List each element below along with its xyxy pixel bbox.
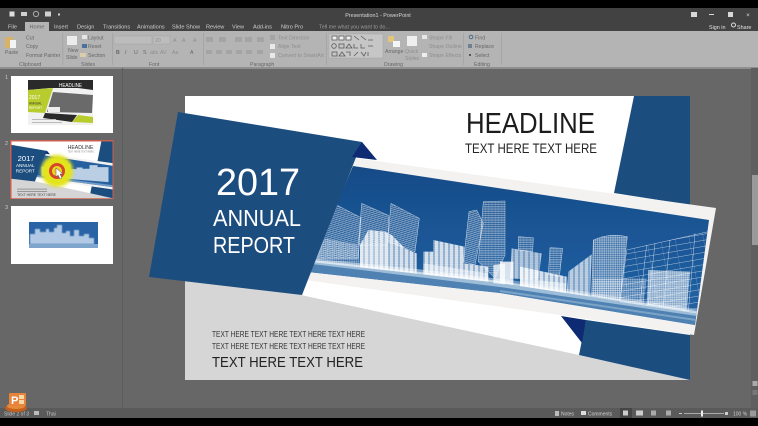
- status bar: Thai: [46, 412, 56, 418]
- thumbnail: slide 2 selected: REPORT: [16, 169, 35, 174]
- shapes gallery: Shape Effects: [429, 53, 462, 59]
- font group: I: [125, 50, 127, 56]
- report title: ANNUAL: [213, 205, 301, 231]
- ribbon tabs: [8, 22, 390, 32]
- navy fold bottom: [561, 316, 586, 343]
- font group: U: [134, 50, 138, 56]
- body text lines: [212, 329, 365, 351]
- font group: Font: [149, 62, 160, 68]
- ribbon separators: [62, 33, 502, 65]
- font group: B: [116, 50, 120, 56]
- shapes gallery: Replace: [475, 44, 494, 50]
- ribbon tabs: View: [232, 24, 245, 30]
- view buttons: [620, 408, 671, 418]
- ribbon tabs: Review: [206, 24, 225, 30]
- icon: PowerPoint mascot logo: [5, 393, 27, 412]
- body text lines: TEXT HERE TEXT HERE TEXT HERE TEXT HERE: [212, 341, 365, 351]
- paragraph group: Paragraph: [250, 62, 274, 68]
- thumbnail: slide 2 selected: ANNUAL: [16, 163, 35, 168]
- blue top right shape: [614, 96, 690, 205]
- shapes gallery: Arrange: [385, 49, 404, 55]
- font group: 20: [155, 38, 161, 44]
- font group: A: [173, 38, 177, 44]
- shapes gallery: Select: [475, 53, 490, 59]
- ribbon tabs: Transitions: [103, 24, 130, 30]
- slides group: Layout: [88, 36, 104, 42]
- thumbnail: slide 2 selected: 2017: [18, 154, 35, 163]
- thumbnail: slide 1: ANNUAL: [29, 102, 42, 106]
- water strip: [308, 262, 697, 325]
- blue bottom right shape: [579, 320, 690, 380]
- font group: [114, 36, 197, 68]
- clipboard group: [5, 36, 61, 68]
- slides group: New: [68, 48, 79, 54]
- zoom slider: 100 %: [733, 412, 748, 418]
- font group: A: [182, 38, 186, 44]
- body text lines: TEXT HERE TEXT HERE TEXT HERE TEXT HERE: [212, 329, 365, 339]
- year: 2017: [216, 162, 300, 204]
- slide: [149, 96, 716, 380]
- thumbnail: slide 2 selected: [4, 140, 118, 199]
- shapes gallery: Shape Fill: [429, 36, 452, 42]
- shapes gallery: Shape Outline: [429, 44, 462, 50]
- font group: A: [190, 50, 194, 56]
- workspace background: [0, 68, 758, 408]
- notes and comments: [555, 411, 613, 418]
- account links: [709, 23, 751, 31]
- ribbon tabs: Insert: [54, 24, 68, 30]
- font group: AV: [160, 50, 167, 56]
- status bar: Slide 2 of 3: [4, 412, 29, 418]
- paragraph group: Text Direction: [278, 36, 310, 42]
- subheadline: TEXT HERE TEXT HERE: [465, 141, 597, 156]
- slides group: [66, 35, 105, 68]
- headline: HEADLINE: [466, 108, 595, 140]
- paragraph group: Convert to SmartArt: [278, 53, 324, 59]
- window controls: ×: [746, 12, 750, 19]
- thumbnail pane: 3: [5, 205, 8, 211]
- thumbnail pane: 1: [5, 75, 8, 81]
- thumbnail: slide 1: HEADLINE: [59, 83, 83, 89]
- thumbnail pane: [4, 68, 123, 408]
- font group: abc: [150, 50, 159, 56]
- ribbon tabs: Tell me what you want to do...: [319, 24, 390, 30]
- ribbon tabs: Design: [77, 24, 94, 30]
- footer text: TEXT HERE TEXT HERE: [212, 354, 363, 371]
- skyline right: [500, 232, 708, 313]
- window controls: [691, 12, 750, 19]
- thumbnail: slide 1: REPORT: [29, 106, 42, 110]
- slides group: Slides: [81, 62, 96, 68]
- shapes gallery: Styles: [405, 56, 420, 62]
- thumbnail: slide 2 selected: TEXT HERE TEXT HERE: [68, 150, 94, 154]
- slides group: Section: [88, 53, 105, 59]
- clipboard group: Clipboard: [19, 62, 41, 68]
- thumbnail pane: 2: [5, 141, 8, 147]
- arrange and editing: [388, 36, 394, 42]
- zoom slider: [679, 410, 756, 418]
- shapes gallery: Drawing: [384, 62, 403, 68]
- paragraph group: [206, 35, 324, 68]
- ribbon tabs: Add-ins: [253, 24, 272, 30]
- slides group: Reset: [88, 44, 102, 50]
- thumbnail: slide 1: [11, 76, 113, 133]
- vertical scrollbar: [751, 68, 758, 408]
- font group: Aa: [172, 50, 178, 56]
- icon: PowerPoint mascot logo: P: [11, 395, 18, 407]
- font group: S: [143, 50, 147, 56]
- thumbnail: slide 2 selected: HEADLINE: [68, 145, 94, 151]
- paragraph group: Align Text: [278, 44, 301, 50]
- title bar: [0, 8, 758, 31]
- ribbon tabs: Slide Show: [172, 24, 201, 30]
- account links: Share: [737, 25, 751, 31]
- shapes gallery: Quick: [405, 49, 419, 55]
- account links: Sign in: [709, 25, 725, 31]
- ribbon tabs: File: [8, 24, 17, 30]
- status bar: [0, 408, 758, 418]
- quick access toolbar: [10, 11, 60, 17]
- clipboard group: Format Painter: [26, 53, 61, 59]
- shapes gallery: Find: [475, 36, 485, 42]
- navy fold top: [352, 142, 377, 160]
- thumbnail: slide 3: [11, 206, 113, 264]
- shapes gallery: Editing: [474, 62, 490, 68]
- shapes gallery: [329, 34, 494, 68]
- clipboard group: Cut: [26, 36, 35, 42]
- click highlight and cursor: [41, 155, 73, 187]
- report title: REPORT: [213, 232, 295, 258]
- clipboard group: Paste: [5, 50, 18, 56]
- skyline left: [312, 201, 505, 284]
- font group: A: [193, 38, 197, 44]
- clipboard group: Copy: [26, 44, 39, 50]
- ribbon tabs: Home: [30, 24, 44, 30]
- gray lower band: [185, 270, 690, 380]
- slide background: [185, 96, 690, 380]
- document title: Presentation1 - PowerPoint: [345, 13, 411, 19]
- thumbnail: slide 1: 2017: [29, 95, 40, 101]
- notes and comments: Notes: [561, 412, 575, 418]
- ribbon tabs: Nitro Pro: [281, 24, 303, 30]
- notes and comments: Comments: [588, 412, 613, 418]
- blue title panel: [149, 112, 362, 295]
- ribbon: [0, 31, 758, 69]
- report title: [213, 205, 301, 258]
- thumbnail: slide 2 selected: TEXT HERE TEXT HERE: [17, 193, 57, 197]
- ribbon tabs: Animations: [137, 24, 165, 30]
- slides group: Slide: [66, 55, 78, 61]
- city image card: [305, 158, 716, 335]
